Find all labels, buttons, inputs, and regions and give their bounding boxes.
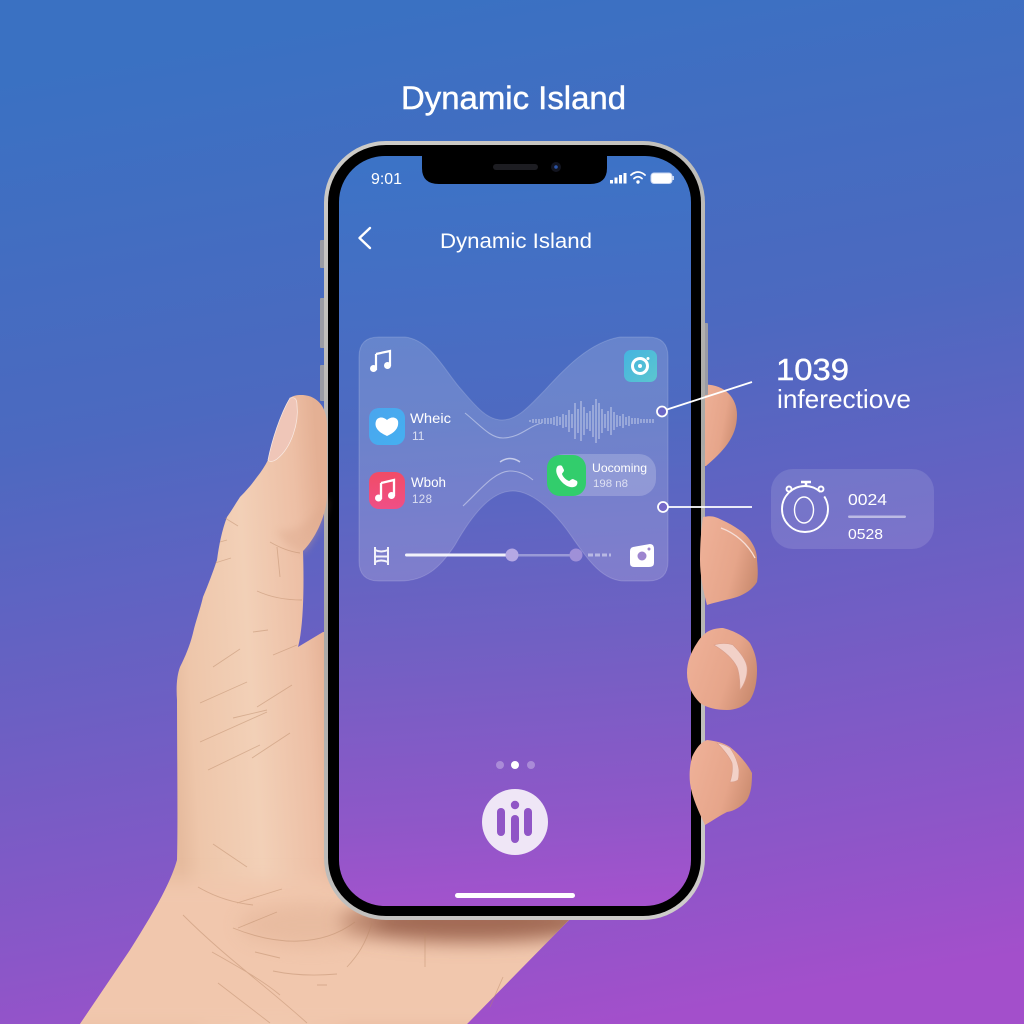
- icon: blue app: [369, 408, 405, 445]
- title: Dynamic Island: [401, 80, 626, 116]
- icon: music note: [370, 351, 391, 372]
- label: 198 n8: 198 n8: [593, 478, 628, 490]
- notch: [422, 154, 607, 184]
- callout connector: waveform: [657, 382, 752, 416]
- phone bezel: [328, 145, 701, 916]
- phone side buttons: [320, 240, 708, 401]
- callout value: 1039: 1039: [776, 352, 849, 387]
- icon: film frame: [375, 547, 388, 565]
- finger 3 nail: [714, 644, 747, 690]
- audio waveform: [530, 399, 653, 443]
- flow curves: [463, 413, 542, 506]
- thumb nail: [268, 398, 297, 461]
- finger 4 nail: [717, 743, 739, 782]
- finger 4: [690, 740, 752, 825]
- finger 1 behind phone: [700, 385, 737, 466]
- icon: green phone tile: [547, 455, 586, 496]
- finger 3: [687, 628, 757, 710]
- page indicator dots: [496, 761, 535, 769]
- phone body: [324, 141, 705, 920]
- timer value 0024: 0024: [848, 492, 887, 509]
- icon: stopwatch: [782, 482, 828, 532]
- phone screen: [339, 156, 691, 906]
- finger 2: [700, 516, 758, 605]
- label: Uocoming: Uocoming: [592, 461, 647, 475]
- status signal bars: [610, 173, 626, 184]
- label: 11: 11: [412, 429, 425, 443]
- timer card: [771, 469, 934, 549]
- incoming call pill: [547, 454, 656, 496]
- icon: teal camera app: [624, 350, 657, 382]
- timer progress line: [848, 516, 906, 518]
- icon: red music app: [369, 472, 405, 509]
- icon: white camera: [630, 544, 654, 567]
- status time: 9:01: [371, 171, 402, 188]
- phone frame: [324, 141, 705, 920]
- panel: dynamic island widget: [359, 337, 668, 581]
- callout label: inferectiove: inferectiove: [777, 384, 911, 414]
- translucent butterfly card: [359, 337, 668, 581]
- back chevron: [360, 228, 370, 248]
- callout connector: call: [658, 502, 752, 512]
- home indicator: [455, 893, 575, 898]
- panel: timer callout: [771, 469, 934, 549]
- finger 2 nail: [721, 528, 755, 558]
- screen heading: Dynamic Island: [440, 229, 592, 253]
- status battery: [651, 173, 674, 184]
- timer value 0528: 0528: [848, 527, 883, 543]
- label: Wheic: Wheic: [410, 410, 451, 426]
- status wifi: [631, 172, 645, 183]
- label: Wboh: Wboh: [411, 475, 446, 490]
- round app button: [482, 789, 548, 855]
- thumb shading: [276, 497, 327, 552]
- speaker: [493, 164, 538, 170]
- label: 128: 128: [412, 494, 432, 506]
- progress slider: [405, 548, 611, 562]
- thumb: [177, 395, 327, 720]
- camera: [551, 162, 561, 172]
- hand: palm and wrist behind phone: [80, 632, 569, 1024]
- skin creases: [183, 518, 503, 1023]
